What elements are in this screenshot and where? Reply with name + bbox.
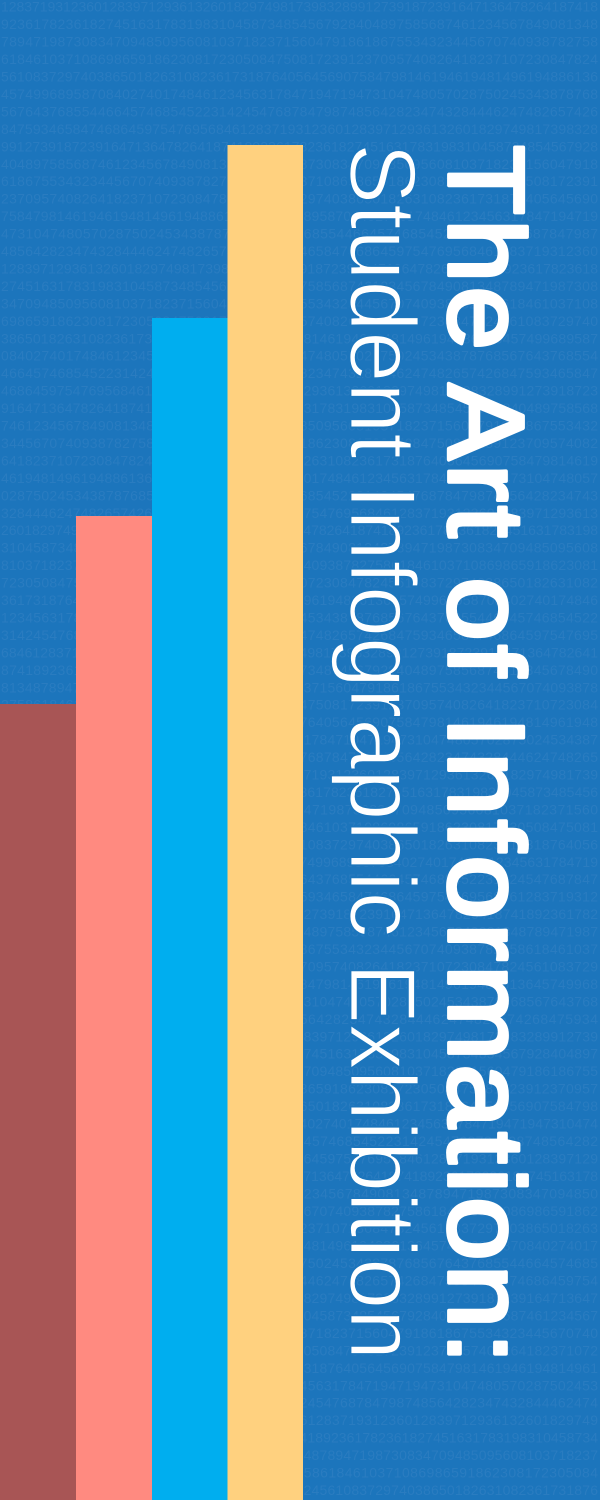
bar 1: brown [0, 704, 76, 1500]
background number pattern: 958708402740174846123456317847194719473104748057028750245343878768567643768 [1, 993, 598, 1009]
background number pattern: 34323445670740938782758618461037108698659186230817230508475081723912370957 [1, 1081, 598, 1097]
background number pattern: 8328991273918723916471364782641874189236178236182745163178319831045873485456 [1, 784, 598, 800]
background number pattern: 361827451631783198310458734854567928404897585687461234567849081348789471987 [1, 924, 598, 940]
background number pattern: 4569075847981461946194814961948861364574996895870840274017484612345631784719 [1, 854, 598, 870]
background number pattern: 6846128371931236012839712936132601829749817398328991273918723916471364782641 [1, 644, 598, 660]
background number pattern: 769568461283719312360128397129361326018297498173983289912739187239164713647 [1, 1290, 598, 1306]
bar chart [0, 145, 303, 1500]
background number pattern: 810371823715604791861867553432344567074093878275861846103710869865918623081 [1, 557, 598, 573]
background number pattern: 78947198730834709485095608103718237156047918618675534323445670740938782758 [1, 34, 598, 50]
background number pattern: 485456792840489758568746123456784908134878947198730834709485095608103718237 [1, 1447, 598, 1463]
background number pattern: 56764376855446645746854522314245476878479874856428234743284446247482657426 [1, 103, 598, 119]
background number pattern: 9912739187239164713647826418741892361782361827451631783198310458734854567928 [1, 138, 598, 154]
background number pattern: 328444624748265742684759346584746864597547695684612837193123601283971293613 [1, 505, 598, 521]
background number pattern: 08402740174846123456317847194719473104748057028750245343878768567643768554 [1, 348, 598, 364]
background number pattern: 48461234563178471947194731047480570287502453438787685676437685544664574685 [1, 1255, 598, 1271]
background number pattern: 461948149619488613645749968958708402740174846123456317847194719473104748057 [1, 470, 598, 486]
background number pattern: 84908134878947198730834709485095608103718237156047918618675534323445670740 [1, 1325, 598, 1341]
background number pattern: 10869865918623081723050847508172391237095740826418237107230847824561083729 [1, 958, 598, 974]
background number pattern: 27451631783198310458734854567928404897585687461234567849081348789471987308 [1, 278, 598, 294]
background number pattern: 72391237095740826418237107230847824561083729740386501826310823617318764056 [1, 836, 598, 852]
title: The Art of Information: [426, 145, 547, 1364]
background number pattern: 750817239123709574082641823710723084782456108372974038650182631082361731876 [1, 1482, 598, 1498]
background number pattern: 87685676437685544664574685452231424547687847987485642823474328444624748265 [1, 749, 598, 765]
background number pattern: 187239164713647826418741892361782361827451631783198310458734854567928404897 [1, 1046, 598, 1062]
background number pattern: 46645746854522314245476878479874856428234743284446247482657426847593465847 [1, 365, 598, 381]
background number pattern: 30817230508475081723912370957408264182371072308478245610837297403865018263 [1, 1220, 598, 1236]
background number pattern: 74612345678490813487894719873083470948509560810371823715604791861867553432 [1, 418, 598, 434]
background number pattern: 43878768567643768554466457468545223142454768784798748564282347432844462474 [1, 1395, 598, 1411]
background number pattern: 108236173187640564569075847981461946194814961948861364574996895870840274017 [1, 1238, 598, 1254]
background number pattern: 813487894719873083470948509560810371823715604791861867553432344567074093878 [1, 679, 598, 695]
bar 4: yellow [228, 145, 303, 1500]
background number pattern: 847593465847468645975476956846128371931236012839712936132601829749817398328 [1, 121, 598, 137]
bar 3: cyan [152, 318, 228, 1500]
background number pattern: 585687461234567849081348789471987308347094850956081037182371560479186186755 [1, 1063, 598, 1079]
background number pattern: 641823710723084782456108372974038650182631082361731876405645690758479814619 [1, 452, 598, 468]
background number pattern: 82657426847593465847468645975476956846128371931236012839712936132601829749 [1, 1412, 598, 1428]
background number pattern: 1461946194814961948861364574996895870840274017484612345631784719471947310474 [1, 1116, 598, 1132]
subtitle: Student Infographic Exhibition [330, 143, 436, 1360]
background number pattern: 31045873485456792840489758568746123456784908134878947198730834709485095608 [1, 540, 598, 556]
background number pattern: 916471364782641874189236178236182745163178319831045873485456792840489758568 [1, 400, 598, 416]
background number pattern: 45223142454768784798748564282347432844462474826574268475934658474686459754 [1, 1273, 598, 1289]
background number pattern: 861364574996895870840274017484612345631784719471947310474805702875024534387 [1, 732, 598, 748]
background number pattern: 40826418237107230847824561083729740386501826310823617318764056456907584798 [1, 1098, 598, 1114]
background number pattern: 826418741892361782361827451631783198310458734854567928404897585687461234567 [1, 1308, 598, 1324]
background number pattern: 742684759346584746864597547695684612837193123601283971293613260182974981739 [1, 766, 598, 782]
background number pattern: 61867553432344567074093878275861846103710869865918623081723050847508172391 [1, 173, 598, 189]
background number pattern: 27586184610371086986591862308172305084750817239123709574082641823710723084 [1, 697, 598, 713]
background number pattern: 360128397129361326018297498173983289912739187239164713647826418741892361782 [1, 906, 598, 922]
background number pattern: 561083729740386501826310823617318764056456907584798146194619481496194886136 [1, 68, 598, 84]
background number pattern: 554466457468545223142454768784798748564282347432844462474826574268475934 [1, 1011, 598, 1027]
background number pattern: 69865918623081723050847508172391237095740826418237107230847824561083729740 [1, 313, 598, 329]
background number pattern: 30834709485095608103718237156047918618675534323445670740938782758618461037 [1, 941, 598, 957]
background number pattern: 956081037182371560479186186755343234456707409387827586184610371086986591862 [1, 1203, 598, 1219]
background number pattern: 1283971293613260182974981739832899127391872391647136478264187418923617823618 [1, 260, 598, 276]
background number pattern: 386501826310823617318764056456907584798146194619481496194886136457499689587 [1, 330, 598, 346]
background number pattern: 361731876405645690758479814619461948149619488613645749968958708402740174846 [1, 592, 598, 608]
background number pattern: 34456707409387827586184610371086986591862308172305084750817239123709574082 [1, 435, 598, 451]
background number pattern: 78245610837297403865018263108236173187640564569075847981461946194814961948 [1, 714, 598, 730]
background number pattern: 8057028750245343878768567643768554466457468545223142454768784798748564282 [1, 1133, 598, 1149]
background number pattern: 72305084750817239123709574082641823710723084782456108372974038650182631082 [1, 575, 598, 591]
background number pattern: 347432844462474826574268475934658474686459754769568461283719312360128397129 [1, 1150, 598, 1166]
background number pattern: 758479814619461948149619488613645749968958708402740174846123456317847194719 [1, 208, 598, 224]
background number pattern: 26018297498173983289912739187239164713647826418741892361782361827451631783198 [1, 522, 598, 538]
background number pattern: 40489758568746123456784908134878947198730834709485095608103718237156047918 [1, 156, 598, 172]
background number pattern: 45749968958708402740174846123456317847194719473104748057028750245343878768 [1, 86, 598, 102]
background number pattern: 36132601829749817398328991273918723916471364782641874189236178236182745163178 [1, 1168, 598, 1184]
background number pattern: 8173983289912739187239164713647826418741892361782361827451631783198310458734 [1, 1430, 598, 1446]
background number pattern: 3198310458734854567928404897585687461234567849081348789471987308347094850 [1, 1185, 598, 1201]
background number pattern: 74038650182631082361731876405645690758479814619461948149619488613645749968 [1, 976, 598, 992]
background number pattern: 658474686459754769568461283719312360128397129361326018297498173983289912739 [1, 1028, 598, 1044]
background number pattern: 47918618675534323445670740938782758618461037108698659186230817230508475081 [1, 819, 598, 835]
background number pattern: 61846103710869865918623081723050847508172391237095740826418237107230847824 [1, 51, 598, 67]
background number pattern: 48564282347432844462474826574268475934658474686459754769568461283719312360 [1, 243, 598, 259]
background number pattern: 1560479186186755343234456707409387827586184610371086986591862308172305084 [1, 1464, 598, 1480]
background number pattern: 02875024534387876856764376855446645746854522314245476878479874856428234743 [1, 487, 598, 503]
background number pattern: 468645975476956846128371931236012839712936132601829749817398328991273918723 [1, 383, 598, 399]
background number pattern: 92361782361827451631783198310458734854567928404897585687461234567849081348 [1, 16, 598, 32]
background number pattern: 7928404897585687461234567849081348789471987308347094850956081037182371560 [1, 801, 598, 817]
background number pattern: 98748564282347432844462474826574268475934658474686459754769568461283719312 [1, 889, 598, 905]
background number pattern: 94886136457499689587084027401748461234563178471947194731047480570287502453 [1, 1377, 598, 1393]
background number pattern: 938782758618461037108698659186230817230508475081723912370957408264182371072 [1, 1342, 598, 1358]
background number pattern: 31424547687847987485642823474328444624748265742684759346584746864597547695 [1, 627, 598, 643]
background number pattern: 4731047480570287502453438787685676437685544664574685452231424547687847987 [1, 226, 598, 242]
background number pattern: 87418923617823618274516317831983104587348545679284048975856874612345678490 [1, 662, 598, 678]
background number pattern: 308478245610837297403865018263108236173187640564569075847981461946194814961 [1, 1360, 598, 1376]
background number pattern: 12345631784719471947310474805702875024534387876856764376855446645746854522 [1, 610, 598, 626]
bar 2: salmon [76, 516, 152, 1500]
background number pattern: 23709574082641823710723084782456108372974038650182631082361731876405645690 [1, 191, 598, 207]
background number pattern: 34709485095608103718237156047918618675534323445670740938782758618461037108 [1, 295, 598, 311]
background number pattern: 47194731047480570287502453438787685676437685544664574685452231424547687847 [1, 871, 598, 887]
